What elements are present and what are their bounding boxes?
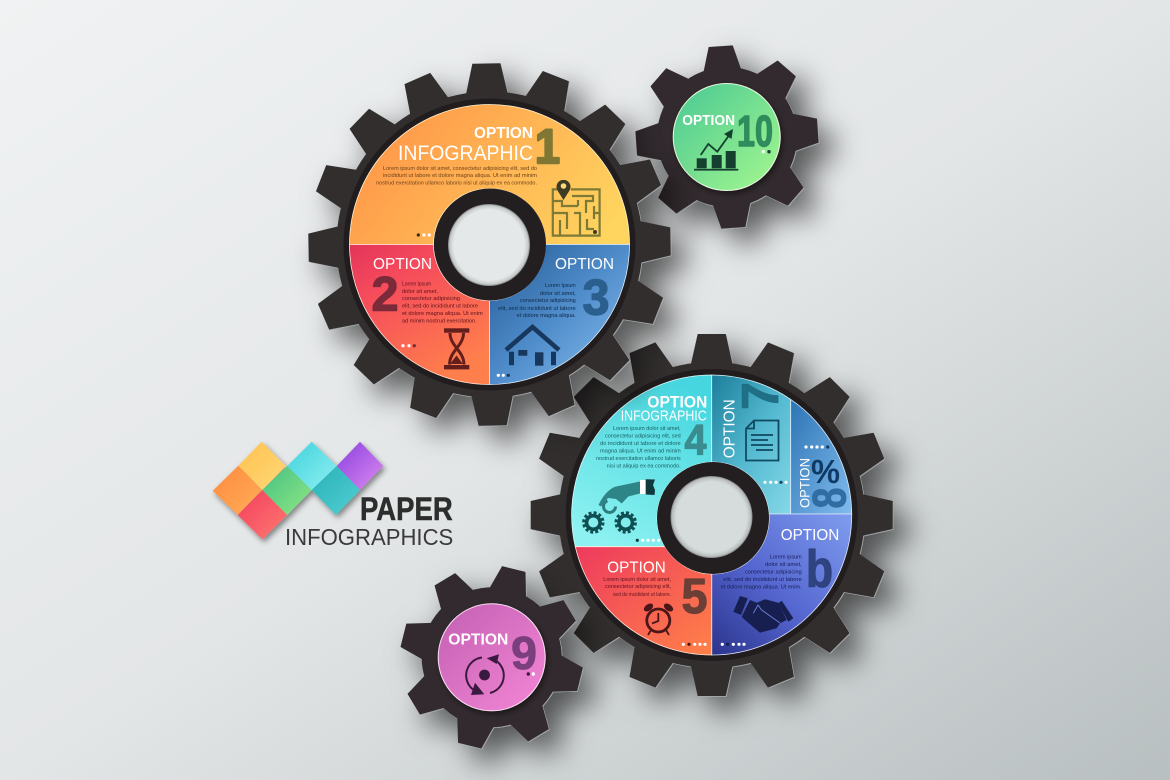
option 1 heading: OPTION xyxy=(474,125,533,142)
gear: large upper options 1-3 xyxy=(305,60,674,429)
center ring xyxy=(657,462,769,574)
option 6 body text: dolor sit amet, xyxy=(765,562,802,568)
option 4 heading: OPTION xyxy=(647,392,707,411)
icon: rotating arrows xyxy=(466,654,504,695)
panel: option 2 xyxy=(350,244,490,384)
option 5 body text: Lorem ipsum dolor sit amet, xyxy=(603,577,671,583)
logo: paper infographics xyxy=(213,442,453,550)
option 5 shape xyxy=(575,547,712,655)
option 1 body text: incididunt ut labore et dolore magna aliqua. Ut enim ad minim xyxy=(383,173,537,179)
option 7 label: OPTION xyxy=(721,399,738,458)
gear 9 disc xyxy=(438,604,545,711)
number 10: 10 xyxy=(737,107,773,156)
logo diamonds xyxy=(213,442,383,539)
gear: large lower options 4-8 xyxy=(531,334,893,697)
option 5 body text: sed do incididunt ut labore. xyxy=(613,592,671,598)
option 5 body text xyxy=(603,577,671,598)
option 4 body text: magna aliqua. Ut enim ad minim xyxy=(600,448,681,454)
center ring xyxy=(434,188,546,300)
option 3 body text: et dolore magna aliqua. xyxy=(517,313,576,319)
number 9: 9 xyxy=(511,627,537,679)
option 1 body text: nostrud exercitation ullamco laboris nisi ut aliquip ex ea commodo. xyxy=(376,180,537,186)
option 3 shape xyxy=(490,244,630,384)
dots xyxy=(497,374,510,377)
number 4: 4 xyxy=(684,416,707,464)
number 2: 2 xyxy=(372,268,398,322)
option 1 shape xyxy=(350,105,630,245)
panel: option 7 xyxy=(712,375,791,514)
option 6 body text xyxy=(721,554,802,590)
option 4 body text: nisi ut aliquip ex ea commodo. xyxy=(607,464,681,470)
option 8 label: OPTION xyxy=(797,458,812,508)
panel: option 3 xyxy=(490,244,630,384)
dots xyxy=(527,672,535,676)
dots xyxy=(721,643,746,646)
percent sign: % xyxy=(811,453,840,490)
dots xyxy=(636,539,660,542)
icon: maze with map pin xyxy=(553,180,600,236)
option 9 label: OPTION xyxy=(448,631,508,648)
option 3 body text: dolor sit amet, xyxy=(540,291,576,297)
option 2 body text: dolor sit amet, xyxy=(402,289,438,295)
option 4 body text: nostrud exercitation ullamco laboris xyxy=(596,456,681,462)
segment ring shadow xyxy=(566,369,858,661)
option 4 body text: consectetur adipisicing elit, sed xyxy=(605,434,681,440)
number 1: 1 xyxy=(535,121,560,174)
option 6 body text: consectetur adipisicing xyxy=(745,570,802,576)
option 2 shape xyxy=(350,244,490,384)
number 7: 7 xyxy=(732,382,790,410)
panel: option 1 xyxy=(350,105,630,245)
dots xyxy=(804,445,829,449)
dots xyxy=(401,344,416,347)
option 1 body text xyxy=(376,166,537,186)
option 4 body text xyxy=(596,426,681,470)
option 3 body text: elit, sed do incididunt ut labore xyxy=(498,306,576,312)
option 3 label: OPTION xyxy=(555,256,614,273)
segment ring shadow xyxy=(344,98,636,390)
panel: option 6 xyxy=(712,514,852,655)
option 2 body text: et dolore magna aliqua. Ut enim xyxy=(402,311,483,317)
number 6: b xyxy=(806,541,833,599)
option 3 body text xyxy=(498,283,576,319)
option 4 body text: do incididunt ut labore et dolore xyxy=(600,441,681,447)
icon: alarm clock xyxy=(642,602,675,635)
gear 10 disc xyxy=(673,84,780,190)
option 5 body text: consectetur adipisicing elit, xyxy=(605,584,671,590)
icon: hourglass xyxy=(444,328,469,369)
option 4 shape xyxy=(572,375,712,547)
number 8: 8 xyxy=(802,488,856,508)
option 5 label: OPTION xyxy=(607,560,666,577)
option 6 label: OPTION xyxy=(781,527,839,544)
logo word: infographics: INFOGRAPHICS xyxy=(285,524,453,550)
option 2 body text xyxy=(402,282,483,324)
dots xyxy=(762,150,771,153)
option 4 body text: Lorem ipsum dolor sit amet, xyxy=(613,426,681,432)
number 5: 5 xyxy=(682,570,708,624)
option 1 body text: Lorem ipsum dolor sit amet, consectetur adipisicing elit, sed do xyxy=(383,166,537,172)
option 6 body text: Lorem ipsum xyxy=(770,554,802,560)
option 3 body text: consectetur adipisicing xyxy=(520,298,576,304)
option 2 label: OPTION xyxy=(373,256,432,273)
option 6 body text: et dolore magna aliqua. Ut enim. xyxy=(721,584,802,590)
dots xyxy=(763,481,788,484)
gear 9 body xyxy=(381,547,603,768)
icon: house xyxy=(506,327,559,366)
large upper gear body xyxy=(305,60,674,429)
option 6 body text: elit, sed do incididunt ut labore xyxy=(723,577,802,583)
gear: option 9 xyxy=(381,547,603,768)
option 2 body text: consectetur adipisicing xyxy=(402,296,460,302)
dots xyxy=(682,643,707,646)
icon: hand placing gears xyxy=(584,479,655,532)
panel: option 5 xyxy=(575,547,712,655)
option 2 body text: ad minim nostrud exercitation. xyxy=(402,318,477,324)
option 10 label: OPTION xyxy=(682,113,735,129)
panel: option 8 xyxy=(791,399,856,514)
gear: option 10 xyxy=(630,40,825,235)
gear 10 body xyxy=(630,40,825,235)
panel: option 4 xyxy=(572,375,712,547)
option 6 shape xyxy=(712,514,852,655)
option 4 subheading: INFOGRAPHIC xyxy=(621,409,707,425)
option 3 body text: Lorem Ipsum xyxy=(545,283,576,289)
icon: document xyxy=(746,420,778,460)
logo word: paper: PAPER xyxy=(360,491,453,527)
icon: handshake xyxy=(733,596,793,633)
option 1 subheading: INFOGRAPHIC xyxy=(398,142,533,165)
number 3: 3 xyxy=(582,270,610,326)
large lower gear body xyxy=(531,334,893,697)
option 7 shape xyxy=(712,375,791,514)
option 2 body text: elit, sed do incididunt ut labore xyxy=(402,304,478,310)
icon: growth chart xyxy=(694,129,738,171)
option 2 body text: Lorem Ipsum xyxy=(402,282,431,288)
option 8 shape xyxy=(791,399,852,514)
dots xyxy=(417,233,431,237)
